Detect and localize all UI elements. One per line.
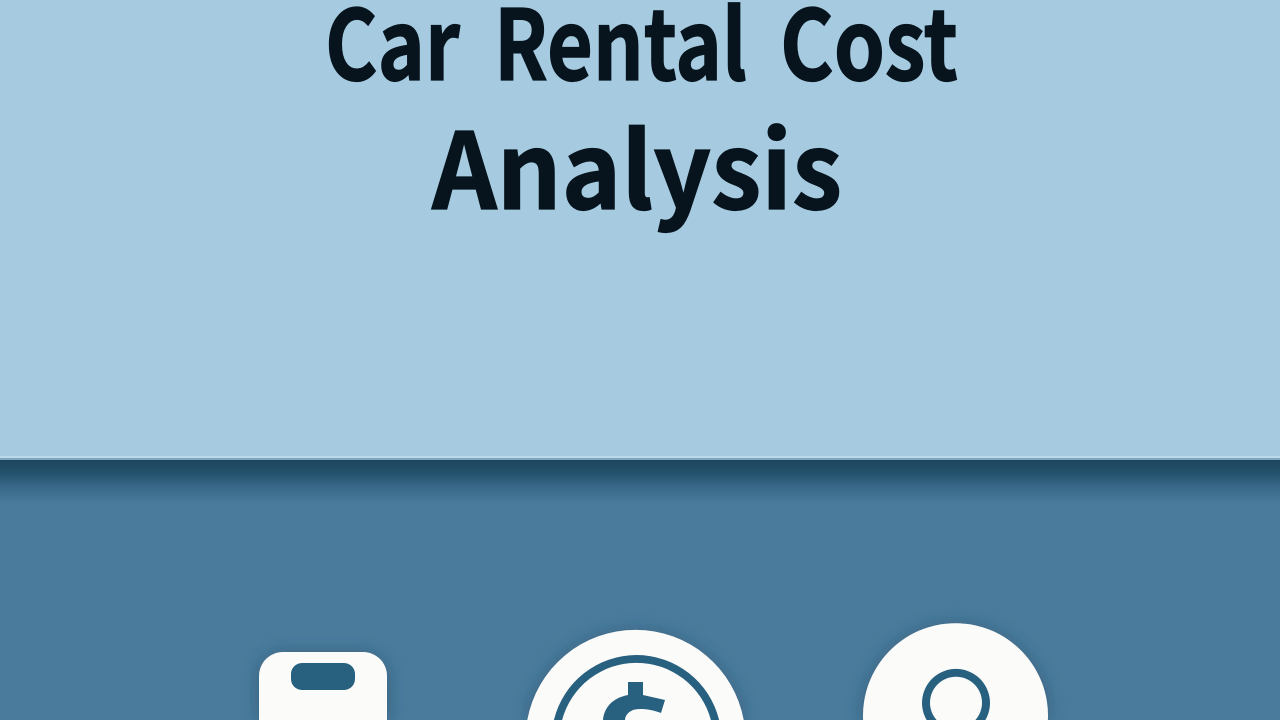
icon: dollar coin bbox=[527, 630, 744, 720]
title: Analysis bbox=[431, 88, 842, 240]
panel: top title background bbox=[0, 0, 1280, 460]
icon: phone bbox=[259, 652, 387, 720]
title bbox=[325, 0, 958, 240]
panel: bottom icon band bbox=[0, 456, 1280, 720]
icon: location search bbox=[863, 623, 1048, 720]
